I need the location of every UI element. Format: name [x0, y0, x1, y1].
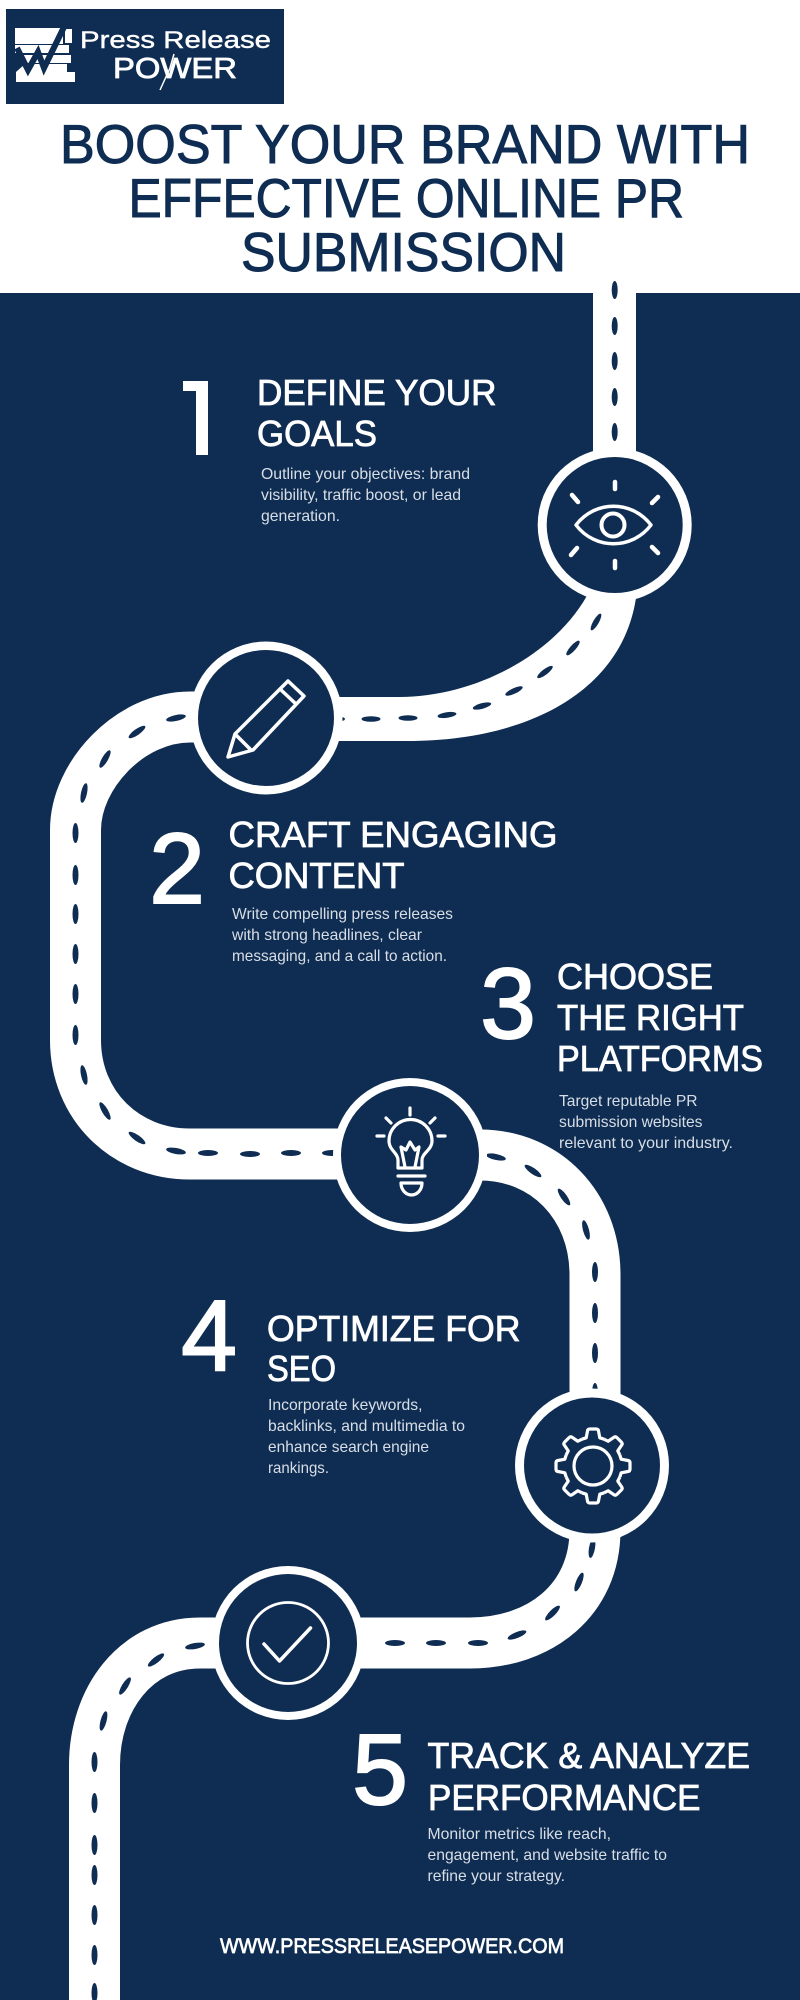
icon: check badge	[211, 1566, 365, 1720]
icon: gear badge	[515, 1388, 669, 1542]
footer website: WWW.PRESSRELEASEPOWER.COM	[220, 1935, 564, 1958]
step 3	[480, 948, 763, 1152]
step 4 heading	[267, 1308, 520, 1389]
step 1 text	[261, 466, 470, 525]
step 3 heading: THE RIGHT	[557, 997, 744, 1038]
step 2 number: 2	[149, 813, 205, 925]
step 3 text: relevant to your industry.	[559, 1135, 733, 1152]
step 3 text: Target reputable PR	[559, 1093, 698, 1110]
step 1 heading: DEFINE YOUR	[257, 372, 496, 413]
logo wordmark top: Press Release	[80, 27, 271, 54]
step 2	[149, 813, 558, 965]
logo: Press Release Power	[6, 9, 284, 104]
step 2 text: messaging, and a call to action.	[232, 948, 447, 965]
step 5 heading: TRACK & ANALYZE	[428, 1735, 750, 1776]
step 3 text	[559, 1093, 733, 1152]
step 1 text: visibility, traffic boost, or lead	[261, 487, 461, 504]
icon: logo mark	[15, 27, 75, 82]
step 3 heading: CHOOSE	[557, 956, 713, 997]
logo lightning stroke	[160, 54, 174, 90]
step 5 text: Monitor metrics like reach,	[428, 1826, 611, 1843]
step 3 heading: PLATFORMS	[557, 1038, 763, 1079]
road	[72, 280, 636, 2000]
step 2 text	[231, 906, 453, 965]
step 1 text: Outline your objectives: brand	[261, 466, 470, 483]
step 3 number: 3	[480, 948, 536, 1060]
step 4 text: backlinks, and multimedia to	[268, 1418, 465, 1435]
step 4 text: enhance search engine	[268, 1439, 429, 1456]
title: EFFECTIVE ONLINE PR	[128, 167, 684, 229]
step 3 text: submission websites	[559, 1114, 702, 1131]
step 3 heading	[557, 956, 763, 1079]
step 2 text: with strong headlines, clear	[231, 927, 423, 944]
title: SUBMISSION	[241, 221, 566, 283]
step 1 number	[183, 381, 208, 455]
step 2 heading: CRAFT ENGAGING	[228, 814, 558, 855]
step 2 text: Write compelling press releases	[232, 906, 453, 923]
step 4 heading: SEO	[267, 1348, 336, 1389]
step 1 heading: GOALS	[257, 413, 377, 454]
step 1	[183, 379, 496, 524]
step 1 heading	[257, 372, 496, 454]
step 5 text: refine your strategy.	[428, 1868, 565, 1885]
icon: pencil badge	[190, 642, 342, 794]
title	[60, 113, 750, 283]
step 2 heading	[228, 814, 558, 896]
road centre dashes	[72, 281, 618, 2000]
icon: light bulb badge	[333, 1078, 487, 1232]
step 5 heading: PERFORMANCE	[428, 1777, 700, 1818]
step 5 text: engagement, and website traffic to	[428, 1847, 667, 1864]
step 4 text	[268, 1397, 465, 1477]
step 1 number: 1	[173, 365, 228, 477]
step 5 heading	[428, 1735, 750, 1818]
title: BOOST YOUR BRAND WITH	[60, 113, 750, 175]
step 5	[352, 1714, 750, 1885]
step 4 heading: OPTIMIZE FOR	[267, 1308, 520, 1349]
step 4 number: 4	[181, 1280, 237, 1392]
step 5 text	[428, 1826, 667, 1885]
step 5 number: 5	[352, 1714, 408, 1826]
step 4 text: rankings.	[268, 1460, 329, 1477]
step 4	[181, 1280, 520, 1477]
step 2 heading: CONTENT	[228, 855, 404, 896]
icon: eye badge	[538, 448, 692, 602]
step 1 text: generation.	[261, 508, 340, 525]
step 4 text: Incorporate keywords,	[268, 1397, 422, 1414]
logo wordmark bottom: POWER	[113, 53, 237, 85]
